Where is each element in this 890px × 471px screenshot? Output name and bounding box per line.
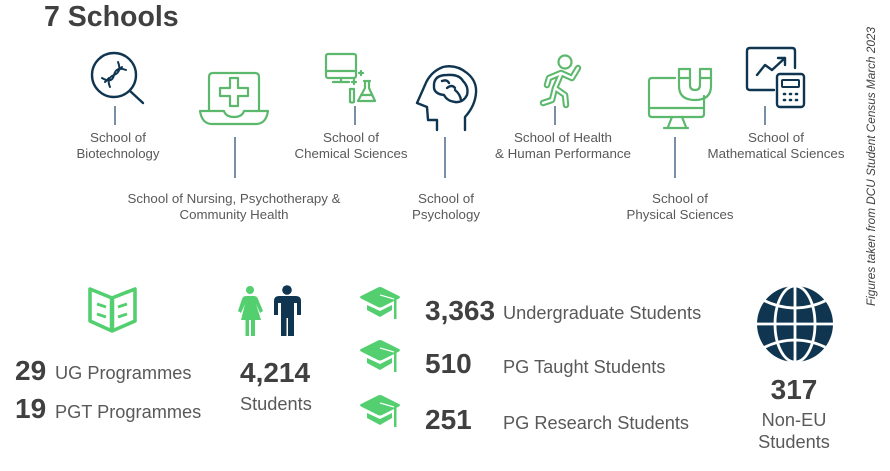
icon: monitor and flask [326,54,375,102]
label: Psychology: School of [418,192,475,206]
icon: woman [238,286,263,336]
connector [114,106,116,125]
stat: non-EU students: Students [758,432,830,452]
stat: PG taught: 510 [425,348,472,379]
connector [554,106,556,125]
title: 7 Schools [44,1,179,33]
stat: undergraduate: Undergraduate Students [503,303,701,323]
icon: laptop with medical cross [200,73,268,124]
icon: monitor and magnet [649,69,711,128]
connector [354,106,356,125]
stat: PGT programmes: 19 [15,393,46,424]
connector [444,137,446,178]
icon: running figure [543,56,578,105]
label: Psychology line 2: Psychology [412,208,481,222]
stat: non-EU students: 317 [771,374,817,405]
label: Health line 2: & Human Performance [495,147,631,161]
label: Nursing: School of Nursing, Psychotherapy & [128,192,341,206]
label: Biotechnology: School of [90,131,147,145]
label: Health: School of Health [514,131,612,145]
connector [764,106,766,125]
icon: open book [90,289,135,331]
stat: total students [240,357,312,414]
icon: DNA magnifier [92,53,143,103]
icon: globe [755,284,835,364]
label: Chemical: School of [323,131,380,145]
stat: PGT programmes [15,393,201,424]
stat: PGT programmes: PGT Programmes [55,402,201,422]
stat: UG programmes: 29 [15,355,46,386]
stat: undergraduate: 3,363 [425,295,495,326]
icon: graduation cap 1 [360,287,400,319]
icon: graduation cap 2 [360,340,400,372]
stat: non-EU students [758,374,830,452]
stat: undergraduate [425,295,701,326]
label: Physical: School of [652,192,709,206]
connector [674,137,676,178]
stat: total students: Students [240,394,312,414]
icon: chart and calculator [747,48,804,107]
label: Chemical line 2: Chemical Sciences [294,147,408,161]
stat: total students: 4,214 [240,357,310,388]
label: Mathematical: School of [748,131,805,145]
stat: PG taught: PG Taught Students [503,357,665,377]
label: Biotechnology line 2: Biotechnology [76,147,160,161]
stat: PG research [425,404,689,435]
stat: UG programmes [15,355,191,386]
label: Nursing line 2: Community Health [180,208,288,222]
icon: man [274,285,301,336]
label: Physical line 2: Physical Sciences [626,208,734,222]
label: Mathematical line 2: Mathematical Sciences [708,147,844,161]
stat: PG taught [425,348,665,379]
icon: head with brain [417,66,476,130]
stat: non-EU students: Non-EU [762,410,826,430]
side note: Figures taken from DCU Student Census March 2023 [864,27,878,306]
stat: PG research: 251 [425,404,472,435]
stat: UG programmes: UG Programmes [55,363,191,383]
stat: PG research: PG Research Students [503,413,689,433]
connector [234,137,236,178]
icon: graduation cap 3 [360,395,400,427]
